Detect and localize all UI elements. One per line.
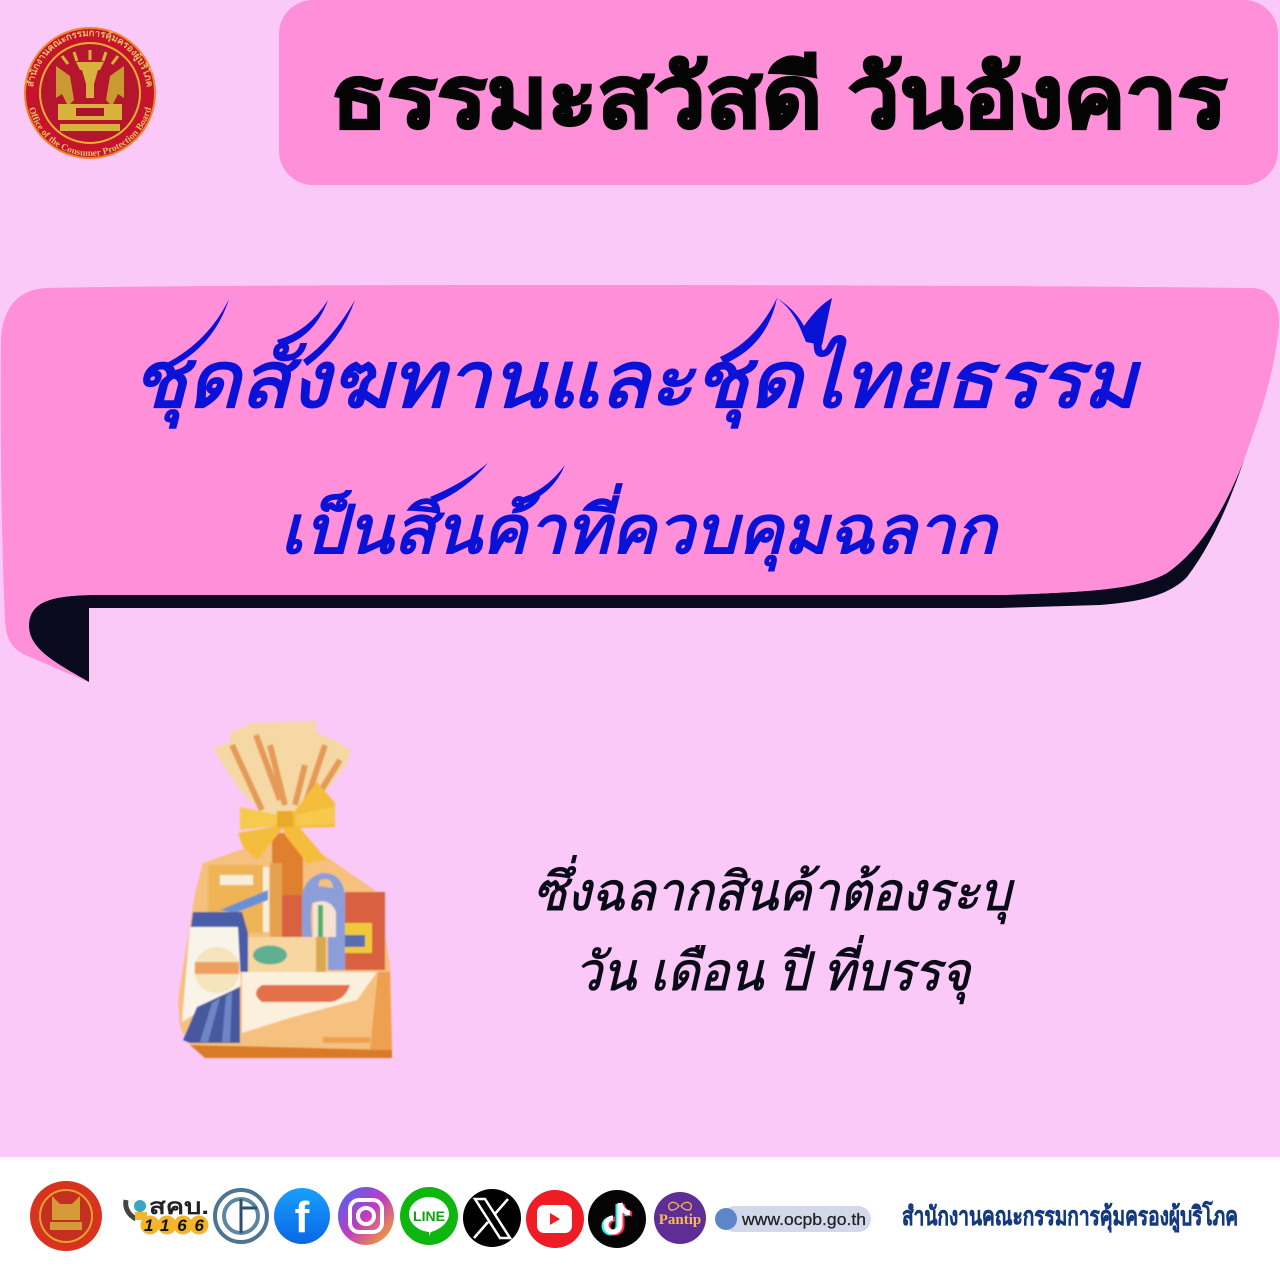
hotline 1166: 1166 [144, 1216, 205, 1235]
logo: office seal top: สำนักงานคณะกรรมการคุ้มครองผู้บริโภค [26, 30, 152, 87]
icon: tiktok [588, 1190, 646, 1248]
icon: facebook: f [295, 1193, 310, 1242]
icon: OCPB [215, 1190, 267, 1242]
neck [272, 833, 303, 897]
title text: ธรรมะสวัสดี วันอังคาร [331, 50, 1227, 146]
side text line 2: วัน เดือน ปี ที่บรรจุ [574, 935, 973, 1004]
website pill: www.ocpb.go.th [741, 1211, 866, 1229]
icon: X [463, 1189, 521, 1247]
icon: facebook [274, 1188, 330, 1244]
yellow label [345, 923, 372, 953]
hotline 1166: สคบ. [149, 1194, 209, 1219]
red boxes [282, 892, 385, 970]
icon: pantip [654, 1192, 706, 1244]
footer band [0, 1157, 1280, 1280]
headline swashes [165, 297, 832, 505]
illustration: gift basket [178, 721, 392, 1058]
bow [238, 782, 335, 863]
icon: youtube [526, 1190, 584, 1248]
website pill [715, 1206, 871, 1232]
title banner [279, 0, 1278, 185]
front white panel [242, 972, 377, 1033]
ribbon banner [1, 285, 1279, 682]
logo: office seal top: Office of the Consumer Protection Board [30, 106, 152, 156]
left box [208, 865, 263, 933]
icon: pantip: Pantip [659, 1212, 701, 1228]
bag body [178, 838, 392, 1057]
ribbon headline line 1: ชุดสังฆทานและชุดไทยธรรม [132, 335, 1141, 428]
centre box [248, 937, 327, 973]
logo: office seal top [24, 27, 156, 159]
side text line 1: ซึ่งฉลากสินค้าต้องระบุ [533, 855, 1015, 924]
ribbon headline line 2: เป็นสินค้าที่ควบคุมฉลาก [280, 484, 999, 571]
hook blue item [302, 873, 345, 970]
icon: line [400, 1187, 458, 1245]
blue packet [191, 912, 248, 972]
icon: instagram [338, 1187, 394, 1245]
footer seal [30, 1181, 102, 1251]
icon: line: LINE [413, 1208, 445, 1224]
hotline 1166 [126, 1194, 209, 1235]
bag top fan [213, 721, 351, 818]
